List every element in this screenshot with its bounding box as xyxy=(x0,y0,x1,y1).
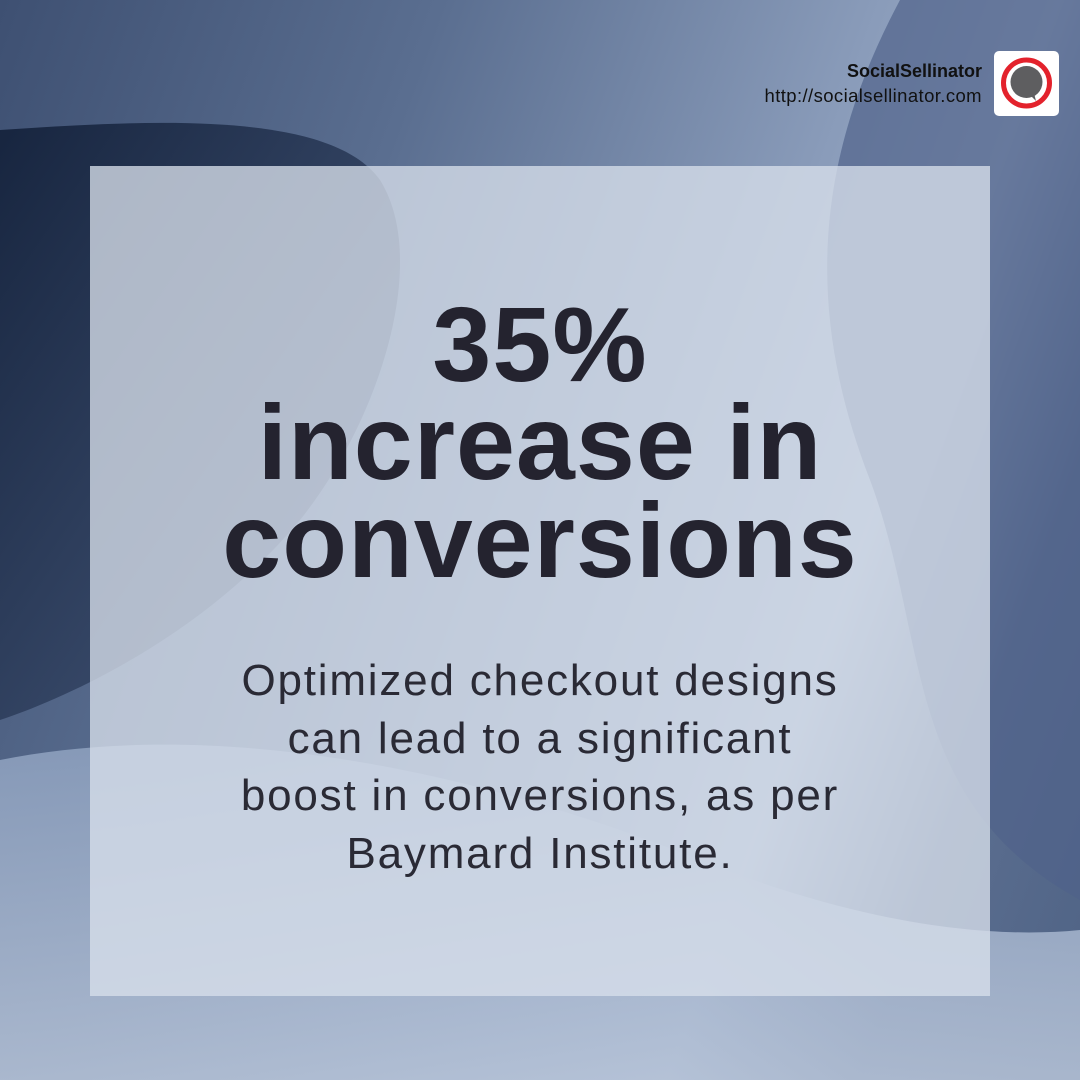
brand text: http://socialsellinator.com xyxy=(765,85,982,106)
body text: can lead to a significant xyxy=(288,714,792,762)
brand text: SocialSellinator xyxy=(847,61,982,81)
panel xyxy=(90,166,990,996)
title: 35% xyxy=(432,286,648,404)
icon: logo xyxy=(994,51,1059,116)
title xyxy=(222,286,858,600)
body text: Optimized checkout designs xyxy=(241,656,839,705)
body text xyxy=(241,656,839,878)
title: increase in xyxy=(258,384,822,502)
body text: Baymard Institute. xyxy=(346,828,734,878)
body text: boost in conversions, as per xyxy=(241,771,839,820)
title: conversions xyxy=(222,482,858,600)
brand text xyxy=(765,61,982,106)
